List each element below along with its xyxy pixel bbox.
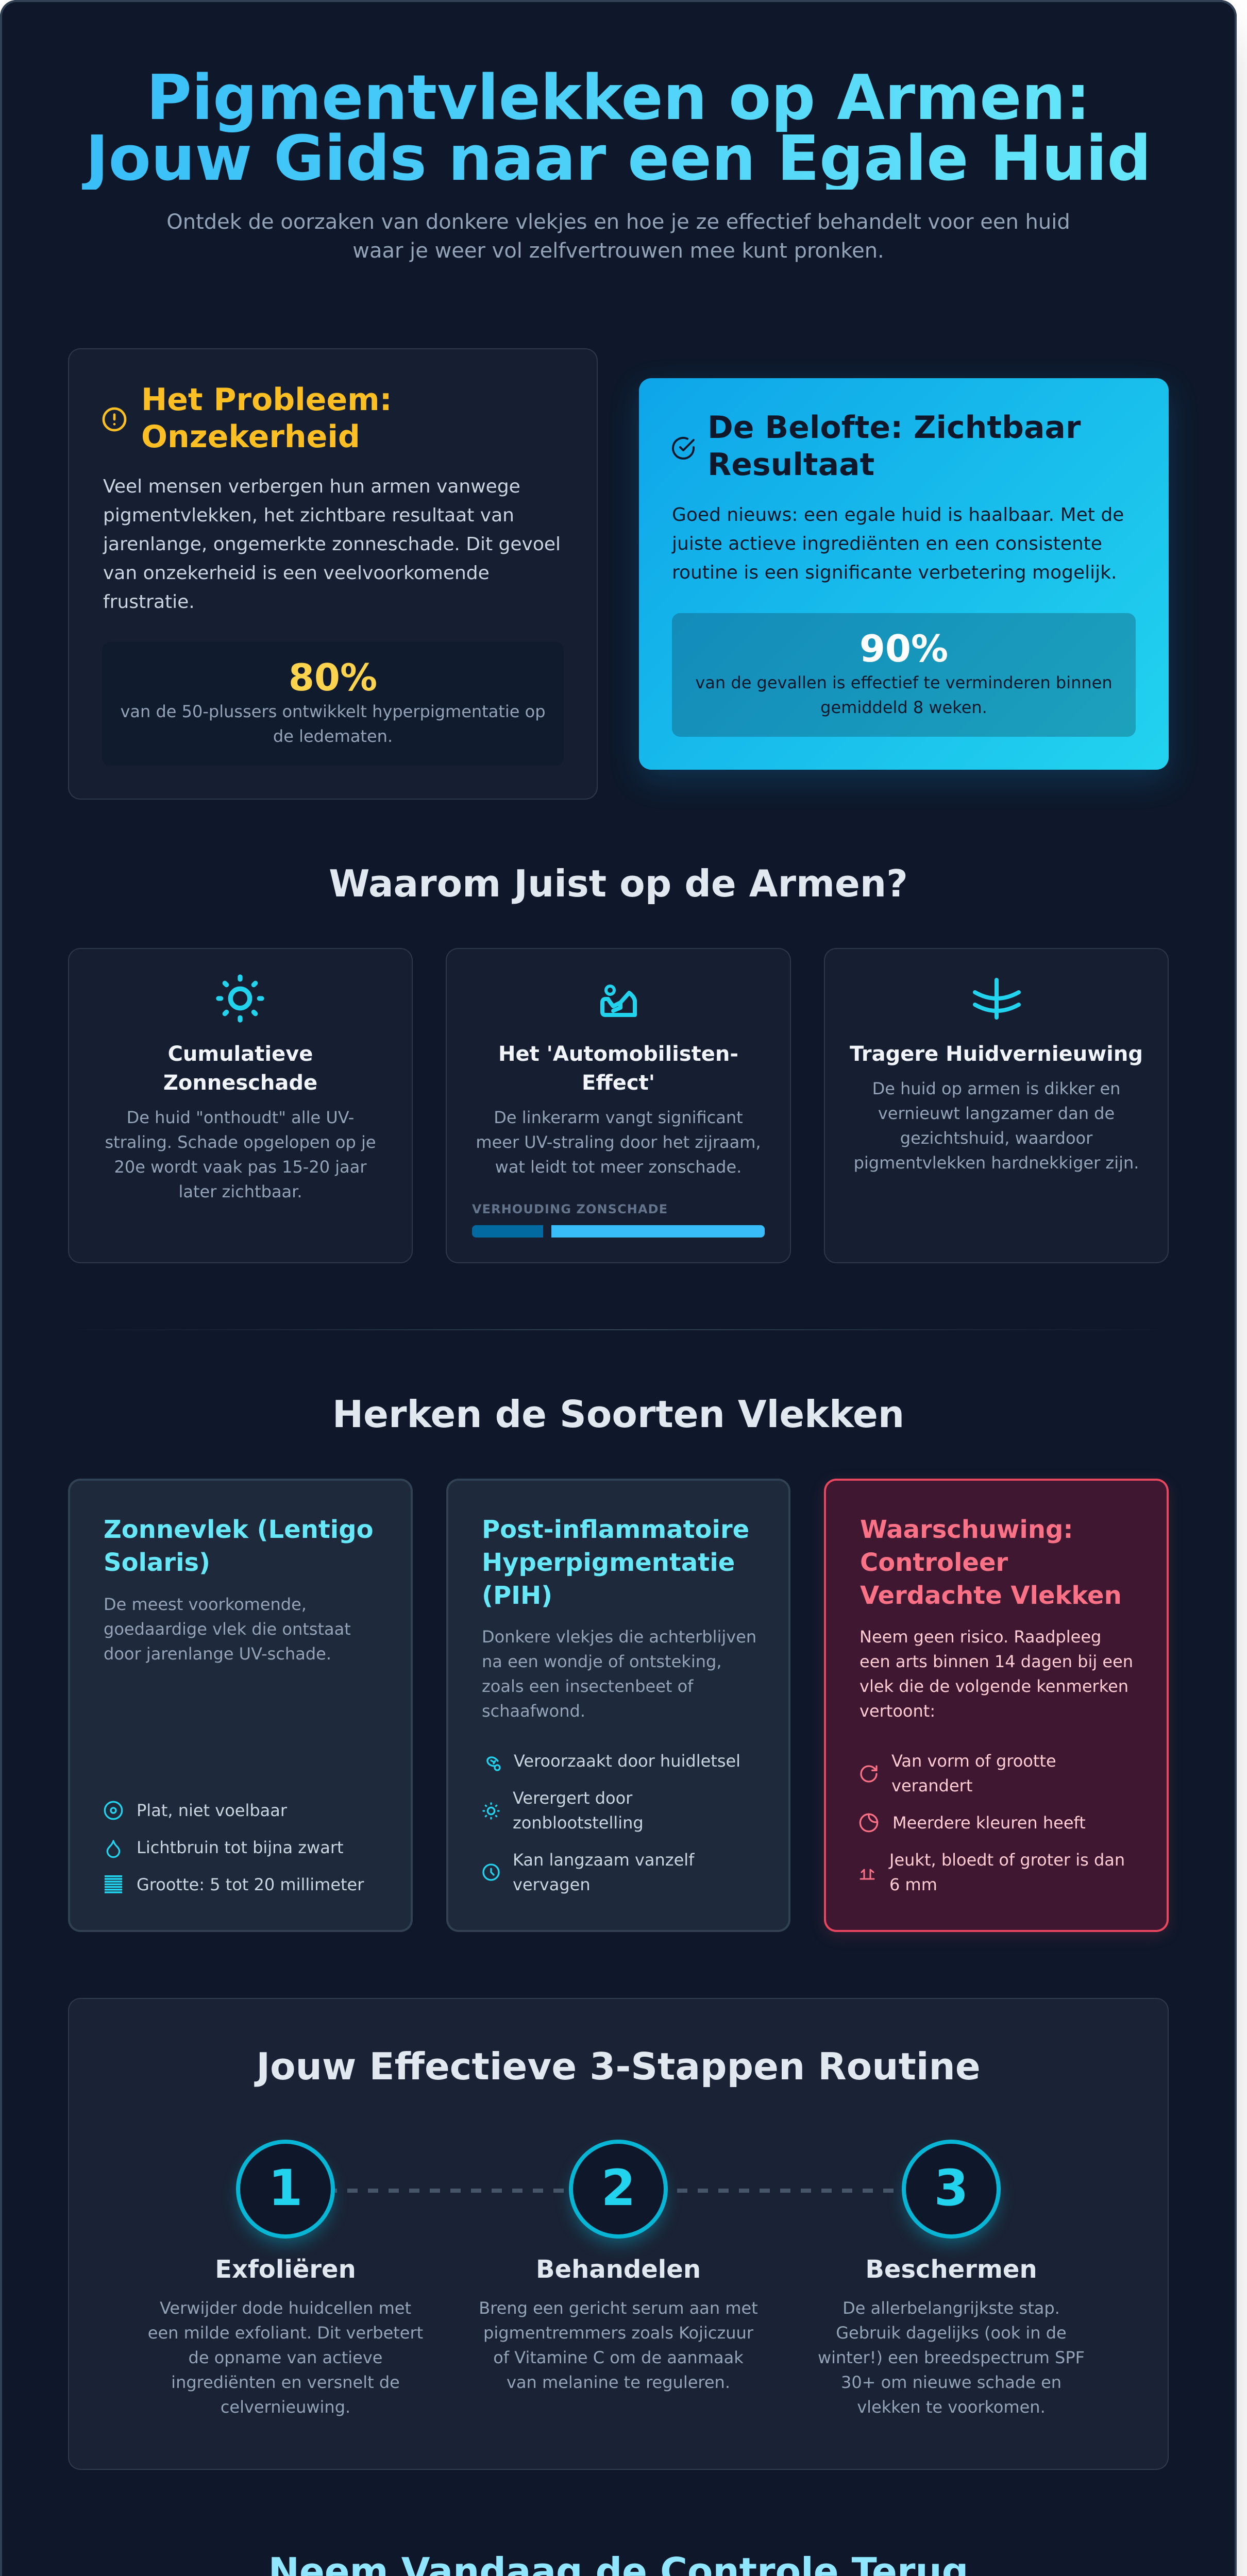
text: probleem: Veel mensen verbergen hun armen vanwege [103, 476, 520, 497]
bar segment: rechterarm [472, 1225, 543, 1238]
icon: droplet [103, 1838, 124, 1859]
card text [105, 1108, 376, 1201]
card text: schaafwond. [482, 1701, 585, 1721]
step text: Breng een gericht serum aan met [479, 2298, 758, 2318]
step text: een milde exfoliant. Dit verbetert [148, 2323, 423, 2343]
card text [860, 1624, 1133, 1723]
digit: 1 [268, 2159, 302, 2217]
stat number: 90% [860, 627, 948, 670]
card title: Controleer [860, 1548, 1008, 1577]
item text [513, 1848, 694, 1897]
panel: tragere huidvernieuwing [824, 948, 1169, 1263]
card text: door jarenlange UV-schade. [104, 1644, 331, 1664]
icon: clock [481, 1862, 501, 1883]
text: probleem: pigmentvlekken, het zichtbare resultaat van [103, 505, 514, 526]
step 1 [131, 2140, 440, 2449]
card text: wat leidt tot meer zonschade. [495, 1157, 742, 1177]
step text [464, 2296, 773, 2395]
card title: Effect' [582, 1071, 655, 1095]
card title [163, 1042, 317, 1095]
text: probleem: jarenlange, ongemerkte zonneschade. Dit gevoel [103, 534, 561, 555]
card title: Waarschuwing: [860, 1515, 1073, 1544]
panel: het probleem [68, 348, 598, 800]
item text: verandert [891, 1776, 972, 1795]
step number 2 [569, 2140, 668, 2239]
heading: het probleem: Onzekerheid [141, 419, 360, 455]
step text: 30+ om nieuwe schade en [841, 2372, 1061, 2392]
card text: goedaardige vlek die ontstaat [104, 1619, 351, 1639]
card text: Neem geen risico. Raadpleeg [860, 1627, 1101, 1647]
subtitle [166, 210, 1070, 263]
item text: zonblootstelling [513, 1813, 644, 1833]
list item: jeukt [860, 1848, 1148, 1897]
list item: plat [104, 1801, 288, 1820]
card text [104, 1595, 351, 1664]
subtitle: Ontdek de oorzaken van donkere vlekjes en hoe je ze effectief behandelt voor een huid [166, 210, 1070, 234]
stat caption [695, 673, 1113, 717]
list item: zon [481, 1786, 769, 1835]
step text: de opname van actieve [189, 2348, 382, 2367]
text: belofte: Goed nieuws: een egale huid is haalbaar. Met de [672, 504, 1124, 526]
card text: De linkerarm vangt significant [494, 1108, 743, 1127]
item text: Plat, niet voelbaar [137, 1801, 287, 1820]
card title [482, 1513, 749, 1612]
step 2 [464, 2140, 773, 2449]
icon: check circle [672, 437, 695, 460]
card title [104, 1515, 374, 1577]
item text: Veroorzaakt door huidletsel [514, 1751, 740, 1771]
card text: vertoont: [860, 1701, 935, 1721]
card text: straling. Schade opgelopen op je [105, 1132, 376, 1152]
item text: Meerdere kleuren heeft [892, 1813, 1086, 1833]
panel: automobilisten-effect [446, 948, 791, 1263]
card title: Het 'Automobilisten- [498, 1042, 738, 1066]
step text: celvernieuwing. [221, 2397, 350, 2417]
item text: Van vorm of grootte [891, 1751, 1056, 1771]
heading: de belofte [707, 410, 1081, 483]
stat number: 80% [289, 656, 377, 699]
stat caption: van de gevallen is effectief te verminderen binnen [695, 673, 1113, 692]
card title: Tragere Huidvernieuwing [850, 1042, 1143, 1066]
step text: Gebruik dagelijks (ook in de [836, 2323, 1067, 2343]
icon: sun [216, 974, 264, 1023]
stat caption: de ledematen. [273, 726, 393, 746]
item text [891, 1749, 1056, 1798]
heading: de belofte: Resultaat [707, 447, 874, 483]
card title: Zonnevlek (Lentigo [104, 1515, 374, 1544]
bar segment: linkerarm [551, 1225, 765, 1238]
heading: herken de soorten vlekken: Herken de Soorten Vlekken [332, 1393, 904, 1436]
step text: of Vitamine C om de aanmaak [493, 2348, 744, 2367]
label: verhouding zonschade: VERHOUDING ZONSCHADE [472, 1202, 668, 1216]
card title: Hyperpigmentatie [482, 1548, 735, 1577]
item text [513, 1786, 644, 1835]
card text: De meest voorkomende, [104, 1595, 307, 1614]
item text: 6 mm [889, 1875, 937, 1894]
subtitle: waar je weer vol zelfvertrouwen mee kunt pronken. [352, 239, 884, 263]
card text: vlek die de volgende kenmerken [860, 1676, 1128, 1696]
text: probleem: frustratie. [103, 591, 195, 613]
text: belofte: routine is een significante verbetering mogelijk. [672, 562, 1117, 583]
card text: een arts binnen 14 dagen bij een [860, 1652, 1133, 1671]
card title: (PIH) [482, 1581, 552, 1610]
step text [797, 2296, 1106, 2419]
icon: skin injury [484, 1754, 503, 1773]
list item: kleuren [860, 1810, 1148, 1835]
step 3 [797, 2140, 1106, 2449]
card text: zoals een insectenbeet of [482, 1676, 693, 1696]
icon: rotate [858, 1763, 879, 1784]
icon: alert circle [102, 407, 127, 432]
step title: Exfoliëren [215, 2255, 356, 2284]
digit: 2 [601, 2159, 635, 2217]
panel: cumulatieve zonneschade [68, 948, 413, 1263]
step text: pigmentremmers zoals Kojiczuur [483, 2323, 753, 2343]
text: belofte: juiste actieve ingrediënten en een consistente [672, 533, 1102, 554]
stat box: 90% [672, 613, 1136, 737]
step text: winter!) een breedspectrum SPF [818, 2348, 1085, 2367]
item text: Kan langzaam vanzelf [513, 1850, 694, 1870]
card text [854, 1079, 1139, 1173]
item text: Jeukt, bloedt of groter is dan [889, 1850, 1125, 1870]
stat box: 80% [102, 642, 564, 766]
text: belofte [671, 504, 1124, 583]
card title [860, 1513, 1122, 1612]
card text [476, 1108, 761, 1177]
item text: Grootte: 5 tot 20 millimeter [137, 1875, 364, 1894]
title: Jouw Gids naar een Egale Huid [86, 123, 1151, 195]
heading: routine: Jouw Effectieve 3-Stappen Routine [256, 2045, 981, 2088]
panel: de belofte [639, 378, 1169, 770]
card text: gezichtshuid, waardoor [900, 1128, 1092, 1148]
panel: routine [68, 1998, 1169, 2470]
step text: ingrediënten en versnelt de [171, 2372, 400, 2392]
step title: Behandelen [536, 2255, 701, 2284]
heading: het probleem [141, 382, 392, 455]
icon: skin layers [973, 978, 1021, 1020]
icon: ruler stripes [105, 1875, 122, 1893]
title: Pigmentvlekken op Armen: [146, 62, 1090, 134]
card text: pigmentvlekken hardnekkiger zijn. [854, 1153, 1139, 1173]
list item: kleur [103, 1835, 392, 1860]
icon: driver [600, 985, 637, 1017]
step number 3 [902, 2140, 1001, 2239]
list item: vervagen [481, 1848, 769, 1897]
item text: vervagen [513, 1875, 591, 1894]
card text: De huid op armen is dikker en [872, 1079, 1120, 1098]
step text: van melanine te reguleren. [507, 2372, 730, 2392]
card text: vernieuwt langzamer dan de [878, 1104, 1115, 1123]
stat caption [120, 702, 545, 746]
item text: Verergert door [513, 1788, 632, 1808]
step text [131, 2296, 440, 2419]
step text: Verwijder dode huidcellen met [160, 2298, 411, 2318]
card title: Verdachte Vlekken [860, 1581, 1122, 1610]
list item: huidletsel [481, 1749, 769, 1773]
bar chart: verhouding [472, 1225, 765, 1238]
heading: waarom juist op de armen: Waarom Juist op de Armen? [329, 862, 908, 905]
heading: de belofte: De Belofte: Zichtbaar [707, 410, 1081, 446]
card title: Post-inflammatoire [482, 1515, 749, 1544]
step text: De allerbelangrijkste stap. [842, 2298, 1060, 2318]
card title: Cumulatieve [168, 1042, 313, 1066]
item text [889, 1848, 1125, 1897]
panel: zonnevlek [68, 1479, 413, 1932]
icon: color pie [858, 1812, 879, 1833]
icon: target [104, 1801, 123, 1820]
panel: waarschuwing [824, 1479, 1169, 1932]
card text [482, 1624, 756, 1723]
heading: het probleem: Het Probleem: [141, 382, 392, 418]
panel: pih [446, 1479, 790, 1932]
step text: vlekken te voorkomen. [857, 2397, 1046, 2417]
dashed connector [285, 2189, 951, 2193]
step title: Beschermen [865, 2255, 1037, 2284]
card text: 20e wordt vaak pas 15-20 jaar [114, 1157, 367, 1177]
card text: na een wondje of ontsteking, [482, 1652, 721, 1671]
card title [498, 1042, 738, 1095]
title [68, 68, 1169, 190]
icon: growth arrows [858, 1866, 877, 1883]
stat caption: gemiddeld 8 weken. [820, 698, 987, 717]
text: probleem [103, 476, 561, 613]
card title: Zonneschade [163, 1071, 317, 1095]
card text: De huid "onthoudt" alle UV- [127, 1108, 354, 1127]
digit: 3 [934, 2159, 968, 2217]
icon: small sun [481, 1800, 501, 1821]
card text: Donkere vlekjes die achterblijven [482, 1627, 756, 1647]
text: probleem: van onzekerheid is een veelvoorkomende [103, 563, 490, 584]
item text: Lichtbruin tot bijna zwart [137, 1838, 344, 1857]
stat caption: van de 50-plussers ontwikkelt hyperpigmentatie op [120, 702, 545, 721]
card title: Solaris) [104, 1548, 210, 1577]
step number 1 [236, 2140, 335, 2239]
list item: vorm [860, 1749, 1148, 1798]
card text: later zichtbaar. [178, 1182, 302, 1201]
list item: grootte [103, 1872, 392, 1897]
card text: meer UV-straling door het zijraam, [476, 1132, 761, 1152]
